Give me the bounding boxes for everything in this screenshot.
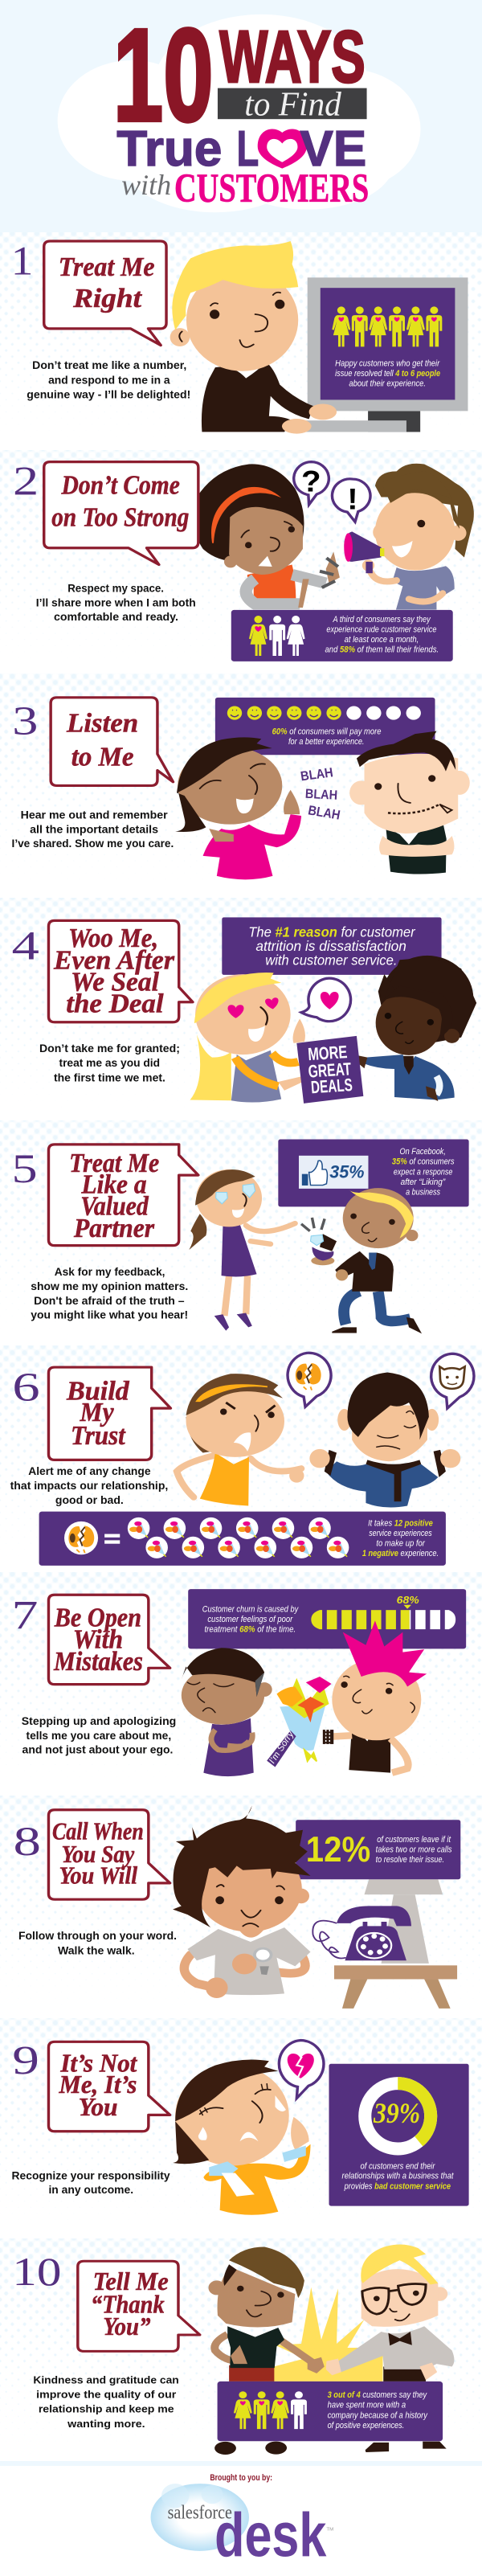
stat box: customer churn 68% (188, 1589, 466, 1648)
stat box: Facebook 35%: a business (406, 1188, 440, 1198)
stat box: 39% donut: relationships with a business that (342, 2172, 454, 2181)
stat box: 60% pay more: for a better experience. (288, 737, 364, 747)
character: emo man (309, 1372, 460, 1508)
stat box: Facebook 35%: On Facebook, (400, 1147, 446, 1157)
panel: 3 Listen to Me (12, 698, 470, 879)
body text: good or bad. (55, 1493, 124, 1506)
body text: and respond to me in a (48, 374, 170, 386)
speech bubble: Tell Me Thank You: You” (103, 2313, 151, 2341)
text: BLAH BLAH BLAH: BLAH (307, 803, 341, 822)
table (334, 1965, 457, 2009)
body text: genuine way - I’ll be delighted! (27, 388, 190, 401)
speech bubble: Build My Trust: My (80, 1397, 114, 1427)
speech bubble: Call When You Say You Will (48, 1810, 170, 1899)
thought bubble: exclamation mark (332, 479, 370, 522)
stat box: 60% pay more: 60% of consumers will pay more (272, 727, 382, 736)
body text: Kindness and gratitude can (33, 2374, 179, 2386)
number 4: 4 (12, 924, 39, 969)
icon: I'm Sorry tag: I’m Sorry (268, 1729, 296, 1765)
title: CUSTOMERS: CUSTOMERS (174, 167, 369, 211)
thought bubble: question mark: ? (301, 465, 321, 498)
speech bubble: Build My Trust: Trust (71, 1420, 126, 1450)
body text: and not just about your ego. (22, 1743, 173, 1756)
title: 10: 10 (113, 2, 214, 149)
speech bubble: Be Open With Mistakes: Be Open (54, 1603, 141, 1632)
thought bubble: exclamation mark: ! (347, 483, 358, 516)
stat box: 12%: takes two or more calls (376, 1845, 452, 1854)
body text (27, 358, 190, 401)
stat box: 12% (296, 1820, 460, 1879)
character: crying woman (173, 2059, 311, 2215)
body text (22, 1714, 176, 1756)
number 8: 8 (13, 1819, 41, 1864)
body text (36, 582, 196, 623)
character: blond man (170, 241, 337, 434)
body text (12, 2169, 170, 2196)
body text: Ask for my feedback, (55, 1266, 165, 1278)
speech bubble: Treat Me Like a Valued Partner: Like a (81, 1169, 147, 1199)
speech bubble: Call When You Say You Will: You Say (62, 1841, 135, 1868)
number 2: 2 (13, 459, 39, 504)
logo: salesforce cloud (151, 2484, 249, 2551)
text: BLAH BLAH BLAH: BLAH (304, 786, 338, 803)
speech bubble: Tell Me Thank You (78, 2261, 200, 2351)
speech bubble: Build My Trust: Build (66, 1376, 129, 1406)
speech bubble: Listen to Me: Listen (66, 707, 138, 738)
speech bubble: Don't Come on Too Strong: on Too Strong (51, 502, 189, 532)
logo: desk: desk (214, 2501, 327, 2570)
body text: that impacts our relationship, (10, 1479, 168, 1492)
sign: MORE GREAT DEALS (296, 1036, 363, 1104)
sign: MORE GREAT DEALS: MORE (307, 1042, 348, 1064)
stat box: 39% donut (329, 2064, 469, 2206)
character: blond man with glasses (326, 2245, 454, 2381)
speech bubble: Woo Me: Woo Me, (68, 923, 158, 953)
thought bubble: heart (301, 978, 351, 1022)
stat screen: 4 to 6 people: about their experience. (349, 379, 426, 389)
icon: heart O (258, 129, 307, 169)
stat box: Facebook 35% (278, 1139, 469, 1206)
body text: wanting more. (67, 2418, 145, 2430)
stat box: customer churn 68%: Customer churn is caused by (202, 1605, 299, 1615)
stat box: 3 out of 4: 3 out of 4 customers say they (328, 2390, 427, 2400)
title: VE: VE (300, 120, 366, 177)
speech bubble: Call When You Say You Will: You Will (59, 1862, 137, 1889)
speech bubble: Listen to Me: to Me (71, 742, 133, 772)
body text: treat me as you did (59, 1057, 160, 1069)
character: woman with diamond eyes (189, 1169, 295, 1331)
body text: Don’t take me for granted; (39, 1042, 180, 1055)
sign: MORE GREAT DEALS: DEALS (310, 1075, 353, 1097)
body text: Respect my space. (67, 582, 164, 594)
number 7: 7 (12, 1593, 38, 1638)
stat box: rude customer service: and 58% of them tell their friends. (325, 645, 439, 654)
stat box: rude customer service (231, 610, 453, 661)
body text: improve the quality of our (36, 2389, 177, 2400)
stat box: rude customer service: at least once a month, (345, 635, 419, 645)
stat box: customer churn 68%: treatment 68% of the time. (204, 1625, 296, 1635)
body text: you might like what you hear! (31, 1308, 188, 1321)
body text (10, 1464, 168, 1506)
speech bubble: It's Not Me, It's You: It’s Not (59, 2050, 137, 2078)
stat box: #1 reason (222, 917, 442, 975)
panel: 4 Woo Me (12, 917, 476, 1104)
body text: the first time we met. (54, 1071, 165, 1083)
body text: Follow through on your word. (18, 1930, 177, 1942)
stat box: 12 positive to 1 negative: 1 negative experience. (362, 1549, 439, 1558)
stat box: Facebook 35%: after “Liking” (401, 1177, 446, 1187)
speech bubble: Listen to Me (51, 698, 173, 785)
body text: all the important details (30, 823, 158, 835)
stat box: Facebook 35%: 35% of consumers (392, 1157, 455, 1166)
character: angry woman (177, 1374, 304, 1506)
footer: brought to you by (151, 2474, 333, 2570)
character: man with megaphone (362, 464, 474, 610)
speech bubble: It's Not Me, It's You: Me, It’s (59, 2071, 137, 2099)
cloud behind title (58, 14, 421, 212)
body text: comfortable and ready. (54, 611, 178, 623)
speech bubble: Build My Trust (48, 1367, 170, 1460)
body text: Hear me out and remember (21, 809, 168, 821)
title: L: L (237, 120, 259, 177)
body text: Recognize your responsibility (12, 2169, 170, 2182)
stat box: 3 out of 4: of positive experiences. (328, 2420, 404, 2431)
stat box: 12 positive to 1 negative: It takes 12 positive (368, 1519, 433, 1528)
stat box: 12%: of customers leave if it (377, 1835, 451, 1845)
body text: Stepping up and apologizing (22, 1714, 176, 1727)
text: Brought to you by: Brought to you by: (210, 2474, 272, 2483)
stat box: 12 positive to 1 negative: to make up for (376, 1539, 426, 1548)
character: man with afro (353, 956, 476, 1101)
number 6: 6 (12, 1366, 40, 1411)
body text (18, 1930, 177, 1956)
shoes (214, 2442, 447, 2455)
character: man kneeling with ring (311, 1188, 422, 1333)
speech bubble: Treat Me Like a Valued Partner: Valued (80, 1190, 149, 1221)
icon: rotary telephone (312, 1906, 411, 1960)
body text (39, 1042, 180, 1083)
speech bubble: Woo Me (48, 920, 193, 1022)
panel: 10 Tell Me Thank You (12, 2245, 454, 2455)
stat box: Facebook 35%: 35% (329, 1161, 364, 1182)
body text (12, 809, 174, 850)
title: WAYS: WAYS (219, 16, 366, 98)
icon: megaphone (344, 531, 384, 562)
speech bubble: Be Open With Mistakes (48, 1595, 170, 1685)
thought bubble: question mark (294, 462, 329, 505)
stat box: rude customer service: A third of consumers say they (333, 615, 431, 625)
number 3: 3 (12, 699, 38, 744)
stat box: #1 reason: with customer service. (265, 952, 397, 968)
stat box: 12%: to resolve their issue. (376, 1855, 444, 1865)
panel: 6 Build My Trust (10, 1353, 474, 1566)
stat screen: 4 to 6 people: issue resolved tell 4 to 6 people (335, 369, 441, 379)
logo: desk: TM (326, 2528, 333, 2533)
stat box: customer churn 68%: customer feelings of poor (207, 1615, 293, 1624)
panel: 9 It's Not Me, It's You (12, 2038, 469, 2215)
speech bubble: Treat Me Right (44, 241, 166, 346)
stat screen: 4 to 6 people (321, 288, 455, 399)
speech bubble: Don't Come on Too Strong (44, 462, 198, 564)
panel: 8 Call When You Say You Will (13, 1805, 460, 2009)
body text: tells me you care about me, (27, 1729, 171, 1742)
number 1: 1 (11, 239, 33, 284)
thought bubble: broken heart (279, 2041, 324, 2099)
stat box: #1 reason: attrition is dissatisfaction (255, 937, 406, 954)
computer monitor stand (292, 277, 468, 432)
title: True: True (116, 120, 222, 177)
number 9: 9 (12, 2038, 39, 2083)
stat box: 3 out of 4 (218, 2381, 443, 2441)
stat box: 3 out of 4: company because of a history (328, 2410, 428, 2420)
burst behind handshake (274, 2287, 382, 2381)
body text: show me my opinion matters. (31, 1280, 188, 1292)
body text: Alert me of any change (28, 1464, 151, 1477)
body text (31, 1266, 188, 1321)
speech bubble: It's Not Me, It's You (48, 2042, 170, 2132)
text: BLAH BLAH BLAH (300, 765, 341, 822)
speech bubble: It's Not Me, It's You: You (79, 2094, 118, 2122)
speech bubble: Treat Me Right: Right (72, 283, 142, 313)
character: pink mohawk man (323, 1620, 427, 1773)
body text: Walk the walk. (58, 1944, 135, 1956)
speech bubble: Treat Me Like a Valued Partner: Partner (73, 1213, 154, 1243)
character: worried man checking watch (173, 1805, 311, 1998)
thought bubble: cat (431, 1354, 474, 1408)
stat box: 12%: 12% (306, 1829, 370, 1870)
stat box: 12 positive to 1 negative: service experiences (369, 1529, 432, 1538)
stat box: rude customer service: experience rude customer service (326, 625, 436, 634)
title (58, 2, 421, 212)
stat box: Facebook 35%: expect a response (394, 1168, 452, 1177)
donut chart 39% (365, 2083, 431, 2148)
panel: 5 Treat Me Like a Valued Partner (12, 1139, 469, 1333)
body text (33, 2374, 179, 2430)
stat box: 39% donut: provides bad customer service (344, 2182, 451, 2191)
speech bubble: Treat Me Like a Valued Partner (48, 1145, 198, 1246)
number 5: 5 (12, 1147, 38, 1192)
sign: MORE GREAT DEALS: GREAT (308, 1059, 352, 1081)
speech bubble: Tell Me Thank You: “Thank (91, 2291, 165, 2319)
panel: 7 Be Open With Mistakes (12, 1589, 466, 1776)
speech bubble: Be Open With Mistakes: With (73, 1624, 123, 1654)
character: man giving thumbs up (208, 2247, 325, 2381)
speech bubble: Treat Me Like a Valued Partner: Treat Me (69, 1148, 159, 1178)
stat box: 39% donut: of customers end their (361, 2162, 435, 2171)
speech bubble: Woo Me: the Deal (66, 988, 164, 1018)
character: woman with heart eyes (190, 973, 305, 1103)
text: BLAH BLAH BLAH: BLAH (300, 765, 334, 784)
stat box: 39% donut: 39% (373, 2098, 420, 2130)
body text: Don’t treat me like a number, (32, 358, 186, 371)
character: zipped-mouth man (349, 731, 470, 874)
stat box: 60% pay more (215, 698, 435, 755)
stat box: 12 positive to 1 negative (39, 1512, 446, 1566)
speech bubble: Woo Me: Even After (53, 945, 174, 975)
character: smiling woman (175, 737, 301, 879)
speech bubble: Woo Me: We Seal (71, 967, 159, 997)
icon: engagement ring box (301, 1218, 337, 1261)
speech bubble: Tell Me Thank You: Tell Me (93, 2268, 169, 2296)
body text: I’ll share more when I am both (36, 596, 196, 608)
character: uncomfortable woman (194, 464, 340, 609)
panel: 1 Treat Me Right (11, 239, 468, 434)
panel: 2 Don't Come on Too Strong (13, 459, 474, 661)
title: to Find banner: to Find (244, 86, 341, 123)
icon: bouquet (276, 1677, 332, 1761)
title: with: with (121, 170, 171, 202)
speech bubble: Don't Come on Too Strong: Don’t Come (61, 469, 180, 500)
character: sad man with crossed arms (182, 1648, 272, 1776)
stat box: customer churn 68%: 68% (397, 1594, 419, 1606)
number 10: 10 (12, 2249, 62, 2294)
speech bubble: Call When You Say You Will: Call When (52, 1818, 144, 1845)
speech bubble: Treat Me Right: Treat Me (59, 252, 154, 282)
stat box: #1 reason: The #1 reason for customer (248, 924, 415, 940)
lamp (364, 1879, 443, 1964)
body text: in any outcome. (48, 2184, 133, 2196)
body text: I’ve shared. Show me you care. (12, 838, 174, 850)
thought bubble: broken egg (288, 1353, 331, 1407)
speech bubble: Be Open With Mistakes: Mistakes (53, 1646, 143, 1677)
stat screen: 4 to 6 people: Happy customers who get their (335, 359, 440, 369)
logo: salesforce cloud: salesforce (168, 2501, 232, 2523)
body text: Don't be afraid of the truth – (34, 1294, 185, 1307)
body text: relationship and keep me (39, 2404, 174, 2415)
stat box: 3 out of 4: have spent more with a (328, 2399, 406, 2410)
